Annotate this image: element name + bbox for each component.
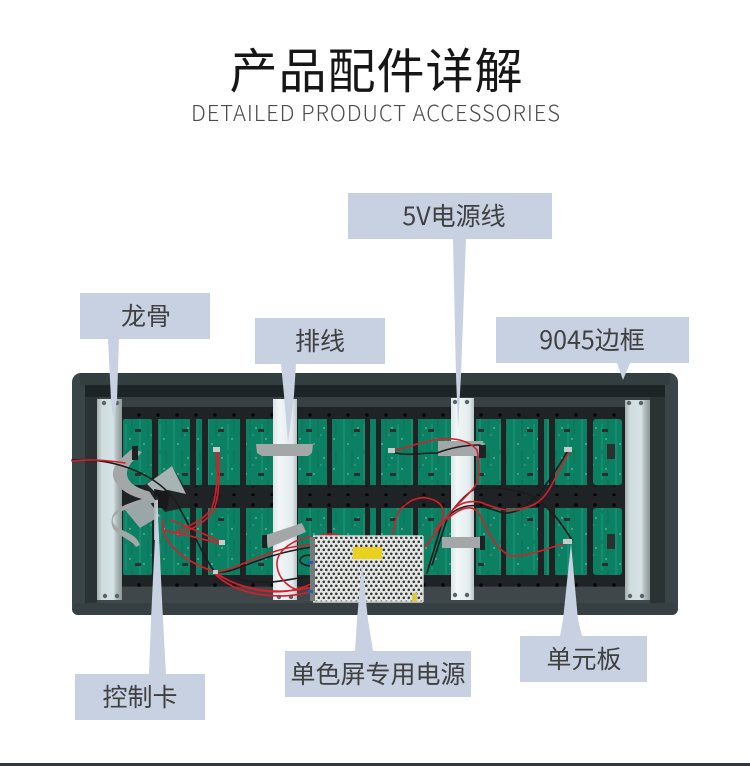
callout: 9045边框: [496, 317, 689, 380]
ribbon cables: [112, 441, 486, 550]
yellow warning label: [353, 547, 382, 559]
callout: 控制卡: [75, 495, 205, 720]
callout: 排线: [255, 318, 385, 443]
callout: 单色屏专用电源: [285, 562, 471, 697]
chips on boards: [135, 429, 615, 566]
callout: 5V电源线: 5V电源线: [402, 197, 506, 233]
callout: 9045边框: 9045边框: [539, 321, 645, 357]
green unit boards: bottom row: [123, 508, 622, 575]
product photo: LED panel rear view: [72, 373, 678, 615]
subtitle: DETAILED PRODUCT ACCESSORIES: [191, 96, 560, 128]
title: 产品配件详解: [229, 32, 524, 102]
power supply unit: [308, 536, 423, 602]
green unit boards: top row: [123, 419, 622, 485]
callout: 龙骨: 龙骨: [121, 297, 171, 333]
power and signal wires: [72, 439, 572, 596]
callout: 控制卡: 控制卡: [102, 678, 178, 714]
callout: 龙骨: [80, 293, 210, 418]
callout: 排线: 排线: [295, 322, 345, 358]
callout: 5V电源线: [348, 193, 552, 428]
black mounting grid: [122, 407, 626, 587]
callout: 单元板: [520, 543, 647, 682]
callout: 单色屏专用电源: 单色屏专用电源: [290, 655, 466, 691]
callout: 单元板: 单元板: [546, 640, 622, 676]
outer 9045 frame: [72, 373, 678, 615]
bottom divider bar: [0, 763, 750, 766]
aluminium keel bars: [97, 398, 650, 600]
control card in bag: [125, 466, 190, 540]
